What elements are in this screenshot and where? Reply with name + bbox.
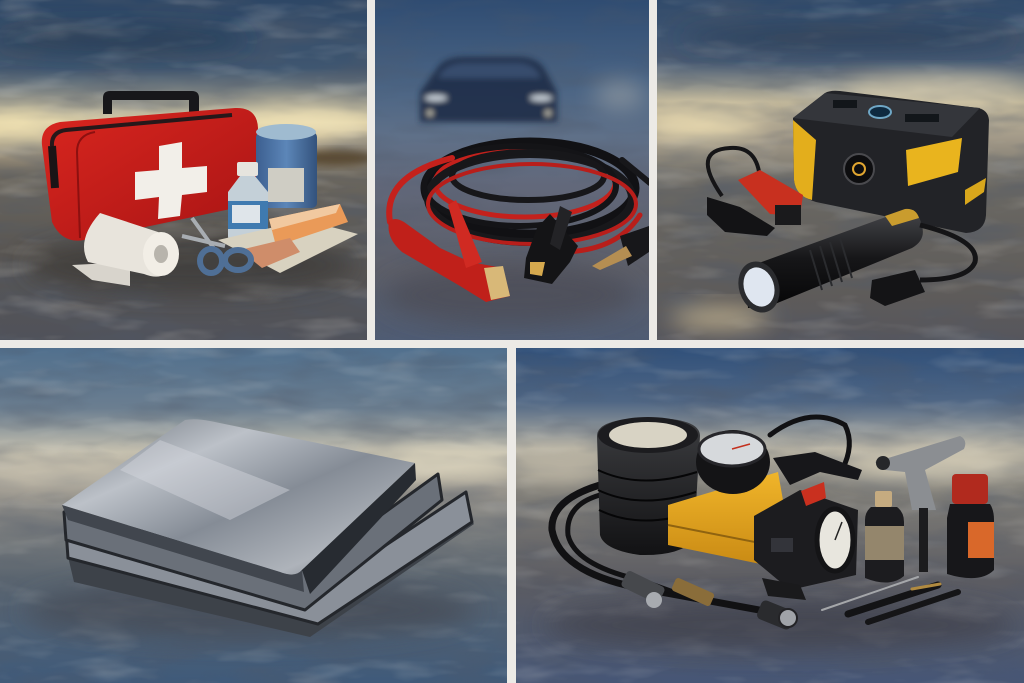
panel: tire compressor and repair kit bbox=[510, 348, 1024, 683]
icon: flashlight cord and plug bbox=[870, 225, 975, 306]
icon: coiled jumper cables bbox=[389, 142, 650, 252]
panel: first aid kit bbox=[0, 0, 375, 340]
icon: small sealant bottle bbox=[865, 491, 904, 583]
icon: air hose bbox=[552, 417, 849, 612]
icon: black cylinder with gauge bbox=[597, 417, 700, 555]
icon: bandage pack bbox=[218, 204, 358, 273]
icon: scissors bbox=[182, 218, 251, 273]
icon: jump clamps bbox=[707, 148, 803, 236]
icon: valve tools bbox=[822, 577, 958, 622]
icon: medicine bottle bbox=[228, 162, 268, 242]
icon: blue jar bbox=[256, 124, 317, 208]
icon: flashlight bbox=[732, 209, 923, 318]
panel: jumper cables bbox=[375, 0, 650, 340]
icon: hose nozzles bbox=[620, 570, 797, 631]
icon: red clamp bbox=[389, 200, 510, 302]
icon: top pressure gauge bbox=[696, 430, 770, 494]
icon: T-handle valve tool bbox=[875, 436, 965, 572]
icon: compressor body bbox=[668, 472, 858, 600]
panel: jump starter and flashlight bbox=[640, 0, 1024, 340]
icon: red capped bottle bbox=[947, 474, 994, 578]
icon: cable plug bbox=[592, 226, 649, 270]
panel: emergency blankets bbox=[0, 348, 520, 683]
icon: jump starter bbox=[793, 91, 989, 233]
icon: folded silver blankets bbox=[62, 419, 474, 637]
icon: gauze roll bbox=[72, 213, 179, 286]
icon: black clamp bbox=[524, 206, 578, 284]
icon: red first aid bag bbox=[42, 91, 258, 241]
icon: car in fog bbox=[420, 57, 557, 122]
icon: connector on hose bbox=[773, 452, 862, 485]
